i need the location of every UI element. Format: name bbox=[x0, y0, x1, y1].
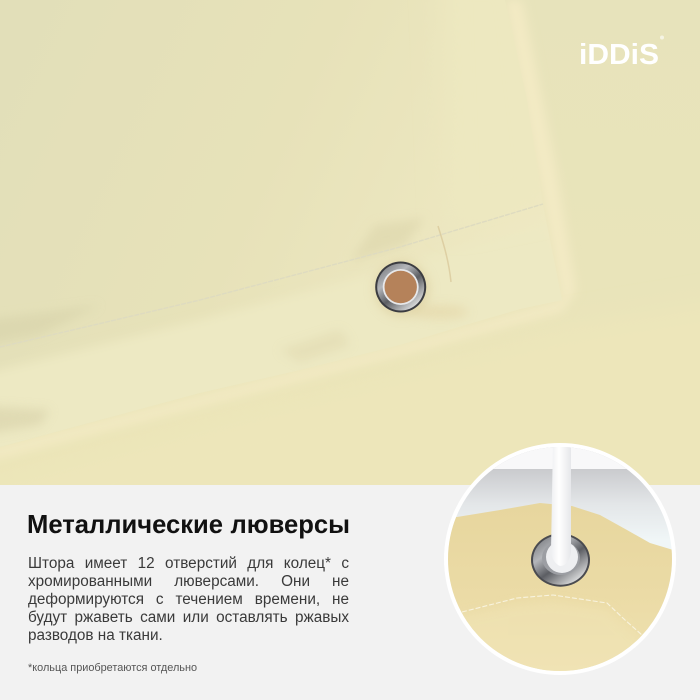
panel: text background bbox=[0, 485, 700, 700]
stitching bbox=[462, 595, 642, 635]
text block: description: будут ржаветь сами или оставлять ржавых bbox=[28, 609, 349, 626]
callout: grommet close-up circle bbox=[444, 443, 676, 675]
text block: description: деформируются с течением времени, не bbox=[28, 591, 349, 608]
rod bbox=[551, 440, 571, 566]
text block: description: хромированными люверсами. Они не bbox=[28, 573, 349, 590]
fabric crease bbox=[438, 226, 451, 282]
text block: description: Штора имеет 12 отверстий для колец* с bbox=[28, 555, 349, 572]
hem stitching bbox=[0, 204, 543, 347]
curtain flap with hem bbox=[0, 204, 555, 444]
text block: description bbox=[28, 555, 349, 644]
grommet bbox=[531, 533, 590, 587]
title: Металлические люверсы bbox=[27, 511, 350, 539]
footnote: *кольца приобретаются отдельно bbox=[28, 662, 197, 674]
text block: description: разводов на ткани. bbox=[28, 627, 163, 644]
background fabric bbox=[0, 0, 700, 520]
icon: metal grommet bbox=[374, 261, 430, 317]
logo: iDDiS bbox=[579, 39, 659, 71]
